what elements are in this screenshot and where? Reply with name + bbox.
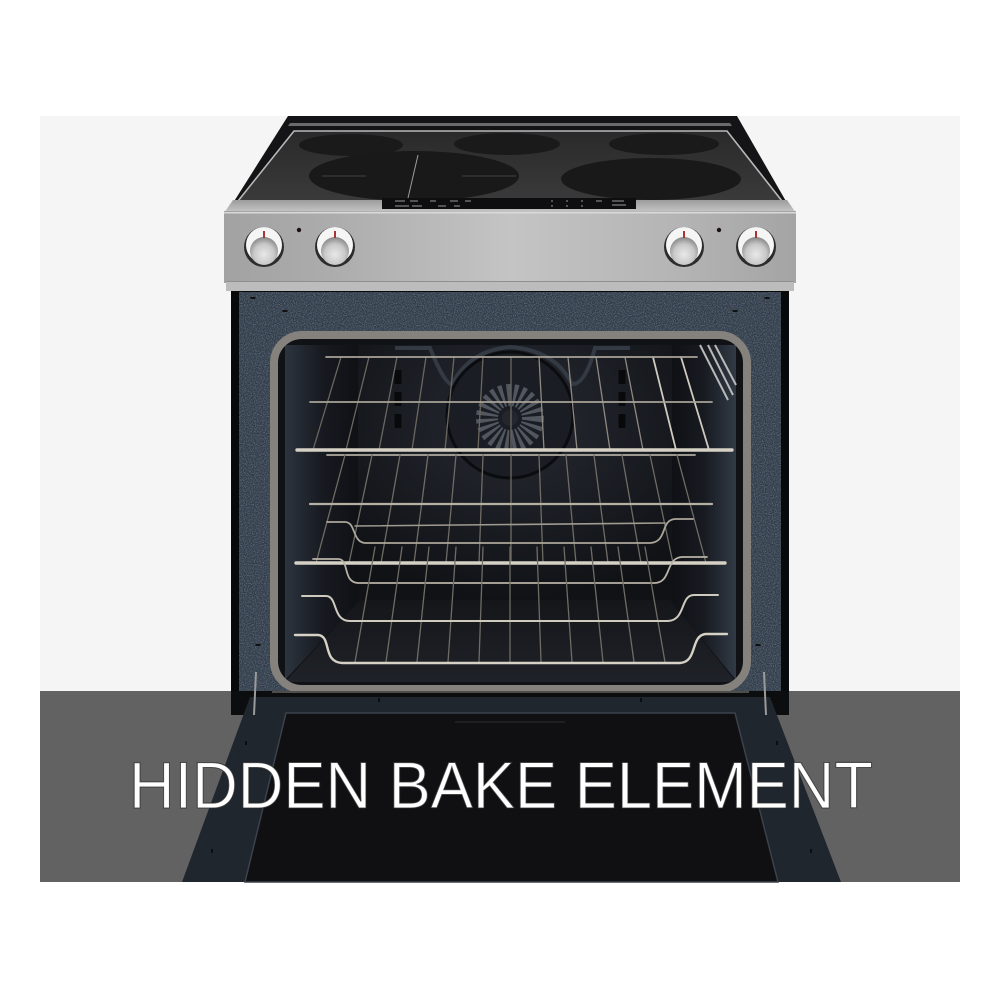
knob: right outer (736, 227, 776, 267)
range cooktop (233, 116, 787, 203)
cooktop glass (238, 131, 782, 201)
side slots (398, 370, 622, 430)
knob: right inner (664, 227, 704, 267)
right rack supports (700, 345, 736, 400)
burner: rear centre (454, 133, 560, 155)
oven rack: bottom (295, 547, 727, 663)
control panel (224, 198, 796, 291)
frame screws (253, 297, 767, 646)
display strip (382, 198, 636, 209)
burner: rear left (299, 134, 403, 156)
open oven door (182, 672, 841, 882)
burner: front right (561, 158, 741, 200)
oven body (231, 291, 789, 715)
indicator light: right (717, 228, 721, 232)
oven lower body through band (231, 691, 789, 715)
oven rack: top (297, 357, 732, 450)
door gasket (274, 335, 747, 689)
title: HIDDEN BAKE ELEMENT (129, 748, 873, 822)
oven rack: middle (296, 455, 725, 583)
indicator light: left (297, 228, 301, 232)
knob: left inner (315, 227, 355, 267)
burner: rear right (609, 133, 719, 155)
caption band (40, 691, 960, 882)
knob: left outer (244, 227, 284, 267)
background panel (40, 116, 960, 882)
burner: front left bridge (309, 151, 519, 201)
oven cavity (271, 332, 750, 691)
convection fan (395, 347, 630, 478)
oven frame (239, 292, 781, 702)
door inner window (245, 713, 778, 882)
